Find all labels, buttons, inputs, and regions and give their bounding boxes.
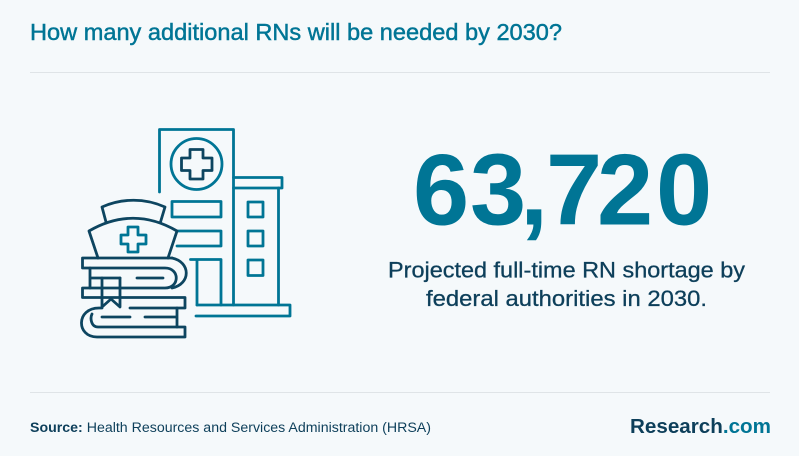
icon: nurse cap [89, 200, 177, 258]
title: How many additional RNs will be needed by 2030? [30, 19, 562, 45]
description text: federal authorities in 2030. [426, 286, 707, 311]
icon: stack of books [81, 258, 186, 337]
description text [388, 258, 745, 311]
icon: medical cross [182, 150, 212, 179]
logo: Research.com [630, 415, 771, 438]
description text: Projected full-time RN shortage by [388, 258, 745, 282]
big number: 63,720 [413, 134, 712, 246]
icon: hospital building [160, 130, 290, 316]
icon: hospital, nurse cap and books [81, 130, 290, 337]
source: Source: Health Resources and Services Administration (HRSA) [30, 420, 431, 435]
